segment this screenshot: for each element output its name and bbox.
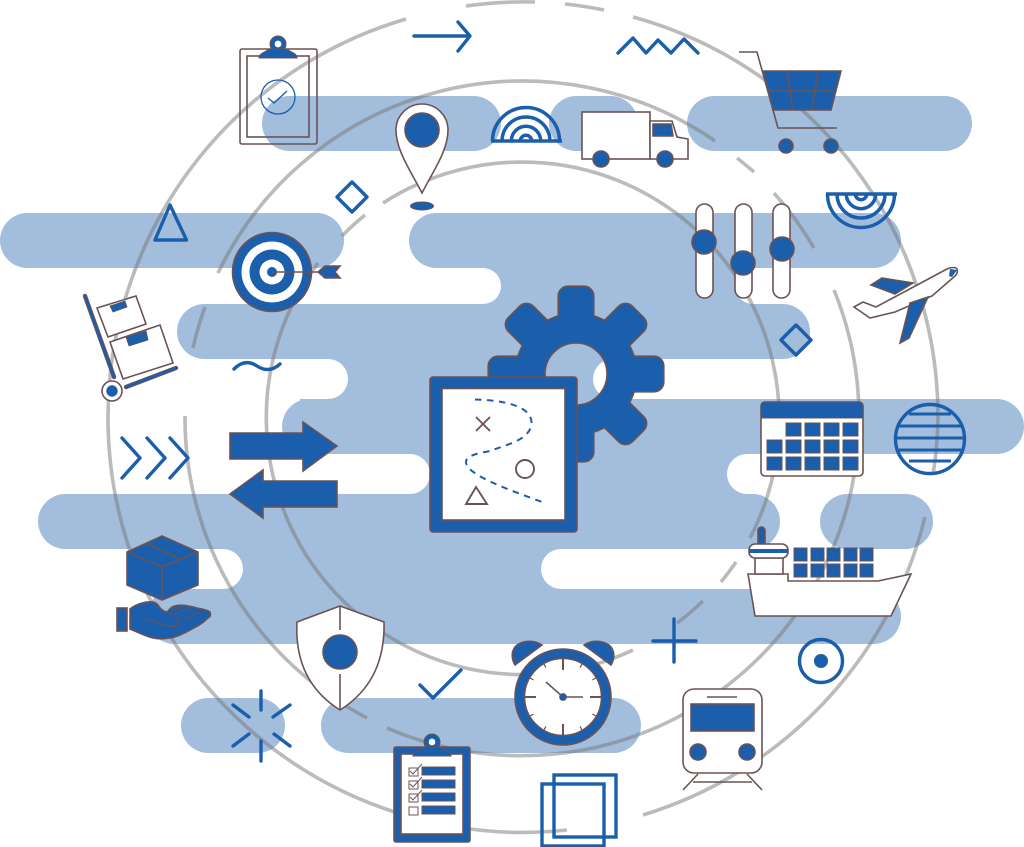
icon: sliders xyxy=(692,204,794,298)
icon: diamond left xyxy=(337,182,367,212)
icon: triple chevrons xyxy=(122,438,188,478)
icon: plus xyxy=(653,619,696,662)
icon: triangle outline xyxy=(155,205,186,240)
icon: calendar xyxy=(761,402,863,476)
icon: check mark xyxy=(420,670,461,698)
icon: delivery truck xyxy=(582,112,688,167)
icon: checklist clipboard xyxy=(394,734,470,842)
icon: airplane xyxy=(854,268,957,343)
background bands xyxy=(0,96,1024,753)
icon: overlapping squares xyxy=(542,775,616,846)
icon: tilde squiggle xyxy=(234,363,280,370)
icon: half rainbow right xyxy=(826,194,897,228)
icon: strategy map xyxy=(430,377,577,532)
icon: gear xyxy=(489,287,663,461)
icon: zigzag xyxy=(618,38,698,53)
icon: approved clipboard xyxy=(240,36,317,144)
icon: half rainbow top xyxy=(491,108,562,141)
icon: sparkle burst xyxy=(233,691,290,761)
icon: shopping cart xyxy=(739,52,841,153)
icon: striped globe xyxy=(896,404,964,474)
icon: location pin xyxy=(396,104,448,210)
icon: hand truck with boxes xyxy=(85,296,176,401)
icon: top arrow xyxy=(414,22,470,51)
icon: diamond right xyxy=(781,325,811,355)
icon: box in hand xyxy=(117,536,210,639)
concentric dashed rings xyxy=(108,2,938,832)
icon: alarm clock xyxy=(512,641,614,745)
icon: cargo ship xyxy=(748,527,911,616)
icon: train xyxy=(683,689,762,790)
icon: small bullseye xyxy=(800,640,842,682)
icon: target with arrow xyxy=(232,232,340,312)
icon: shield xyxy=(297,606,384,710)
icon: exchange arrows xyxy=(230,422,337,518)
